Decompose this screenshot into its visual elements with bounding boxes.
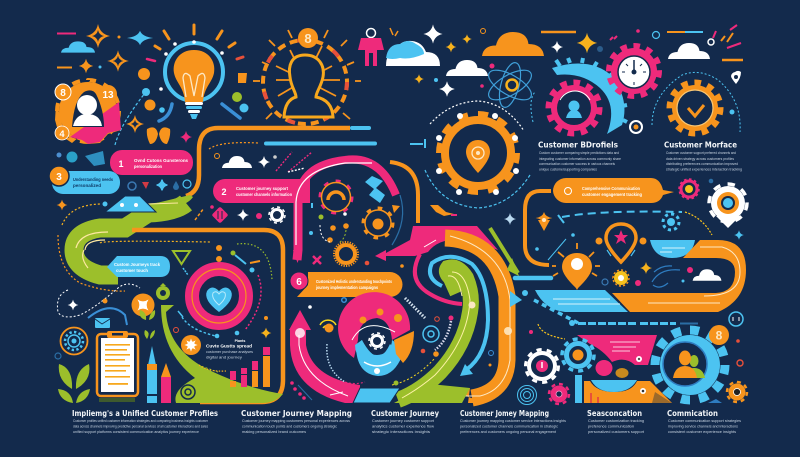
icon: pink ring and white gear pin <box>679 179 747 228</box>
section: customer jomey mapping: Customer Jomey Mapping <box>460 409 549 418</box>
panel: profile card <box>55 80 121 144</box>
icon: blue orange gear <box>55 328 88 359</box>
arrow: lime spiral <box>394 267 476 403</box>
section: implementing unified profiles: Impliemg's a Unified Customer Profiles <box>72 409 218 418</box>
arrow: blue spiral <box>430 257 488 376</box>
icon: pink profile gear <box>550 84 642 133</box>
icon: pink clock gear <box>610 47 658 95</box>
icon: lightbulb <box>138 25 248 121</box>
heading: customer morface: Customer Morface <box>664 140 738 150</box>
callout: tag 1 <box>110 150 193 175</box>
section: customer jomey mapping <box>460 409 566 434</box>
heading: customer profiles: unique customersupporting companies <box>539 166 597 172</box>
arrow: orange big curve <box>445 228 519 403</box>
icon: blue large gear arc <box>552 58 627 134</box>
section: customer journey mapping: Customer Journey Mapping <box>241 409 352 418</box>
icon: atom <box>484 60 536 110</box>
cloud and stars near tag 2 <box>222 152 312 172</box>
icon: glowing head silhouette <box>253 28 361 124</box>
icon: central orange gear with pin <box>410 101 530 208</box>
text block: centre note: customer purchase analyses <box>206 349 253 354</box>
section: customer journey: analytics customer experience flow <box>372 424 434 428</box>
section: commication <box>667 409 741 434</box>
heading: customer profiles <box>538 140 622 172</box>
callout: tag 1: Ovnd Cutons Gunsterons <box>134 158 189 163</box>
section: implementing unified profiles: Customer profiles unified customer information strategies and comparing business insights customer <box>73 418 209 423</box>
section: commication: Customer communication support strategies <box>668 418 741 423</box>
callout: tag 1: personalization <box>134 164 162 169</box>
section: customer jomey mapping: personalized customer channels communication in strategic <box>460 424 558 428</box>
arrow: pink left up arrow <box>289 310 400 403</box>
icon: orange check gear <box>531 72 740 132</box>
section: seasconcation: preference communication <box>588 424 634 428</box>
text block: centre note: Plants <box>235 339 245 343</box>
callout: blue arrow tag: Custom Journeys track <box>114 262 161 267</box>
arrow: pink arc with tag 2 <box>213 159 418 263</box>
chart: centre donut <box>290 292 494 400</box>
section: commication: consistent customer experience insights <box>668 429 736 434</box>
section: customer journey mapping <box>241 409 352 434</box>
icon: small centre gears <box>309 176 516 268</box>
heading: customer morface: distributing preferences communication improved <box>666 161 738 166</box>
callout: tag blue <box>49 166 120 194</box>
heading: customer morface: strategic unified experiences interaction tracking <box>666 166 742 172</box>
callout: tag 6 <box>290 272 402 297</box>
icon: snow badge <box>181 335 201 355</box>
heading: customer profiles: Customer BDrofiels <box>538 140 618 150</box>
panel: top-left decorations <box>56 24 192 166</box>
callout: tag 6: 6 <box>296 277 302 288</box>
heading: customer profiles: communication customer success in various channels <box>539 161 615 166</box>
icon: pin with rays <box>552 243 600 290</box>
badge: 13: 13 <box>102 90 114 101</box>
section: seasconcation: personalized customers support <box>588 429 645 434</box>
badge: 4: 4 <box>59 129 65 139</box>
section: implementing unified profiles: unified support platforms consistent communication analytics journey experience <box>73 429 200 434</box>
section: customer journey mapping: communication touch points and customers ongoing strategic <box>242 424 337 428</box>
text block: centre note: digital and journey <box>206 354 242 360</box>
heading: customer morface: data driven strategy across customers profiles <box>666 156 734 161</box>
arrow: pink arc with tag 2: customer channels information <box>236 192 292 197</box>
icon: big blue people gear <box>655 312 743 400</box>
arrow: pink ribbon <box>375 226 498 304</box>
icon: pencils <box>147 346 171 403</box>
arrow: lime curve inner <box>161 305 283 403</box>
section: customer journey mapping: Customer journey mapping customers personal experiences across <box>242 418 350 423</box>
section: customer journey: Customer journey customer support <box>372 418 435 423</box>
section: seasconcation: Customer customization tracking <box>588 418 644 423</box>
badge: 8: 8 <box>716 328 723 342</box>
badge: 8: 8 <box>304 31 312 46</box>
top clouds and stars <box>386 24 743 97</box>
text block: centre note: Cuvte Gustts spread <box>206 344 252 348</box>
arrow: lime band to blue tag <box>74 195 193 275</box>
heading: customer morface: Customer customer support preferred channels and <box>666 150 736 155</box>
icon: bottom right gears cluster <box>526 335 672 403</box>
icon: pink gear and blue spiral <box>518 384 722 404</box>
callout: tag blue: 3 <box>56 172 62 183</box>
panel: main path orange line <box>186 128 375 196</box>
section: seasconcation <box>587 409 645 434</box>
icon: triangle marker <box>173 251 190 275</box>
icon: clipboard <box>97 331 138 396</box>
arrow: right orange band with cloud <box>510 240 746 326</box>
callout: tag blue: personalized <box>73 183 101 188</box>
panel: right orange tag: Comprehensive Communication <box>582 186 640 191</box>
section: customer journey: Customer Journey <box>371 409 440 418</box>
icon: envelope <box>95 318 110 328</box>
section: customer jomey mapping: Customer journey mapping customer service interactions insights <box>460 418 566 423</box>
callout: tag blue: Understanding needs <box>73 177 113 182</box>
chart: heart ring <box>174 244 272 338</box>
callout: tag 6: journey implementation campaigns <box>315 285 378 290</box>
callout: tag 6: Customized Holistic understanding touchpoints <box>316 279 392 284</box>
section: implementing unified profiles: data across channels improving predictive personal services of all customer interactions and sales <box>73 424 208 428</box>
section: customer journey mapping: making personalized brand outcomes <box>242 429 306 434</box>
badge: 8: 8 <box>60 88 66 99</box>
chart: bars <box>199 347 270 387</box>
arrow: lower-left orange frame <box>57 230 283 402</box>
callout: blue arrow tag <box>107 256 170 277</box>
icon: plant leaves <box>58 310 155 403</box>
icon: orange flower <box>132 283 170 316</box>
callout: blue arrow tag: customer touch <box>116 268 148 273</box>
small icon row <box>57 180 285 225</box>
heading: customer profiles: integrating customer information across commonly share <box>539 156 622 161</box>
text block: centre note <box>206 339 253 360</box>
section: seasconcation: Seasconcation <box>587 409 642 418</box>
heading: customer morface <box>664 140 742 172</box>
heading: customer profiles: Custom customer comparing simple predictions data and <box>539 150 619 155</box>
right mid decorations <box>529 212 744 339</box>
section: customer journey <box>371 409 440 434</box>
section: implementing unified profiles <box>72 409 218 434</box>
callout: tag 1: 1 <box>118 159 124 169</box>
icon: pink person <box>358 28 398 66</box>
panel: right orange tag: customer engagement tracking <box>582 192 642 197</box>
section: customer jomey mapping: preferences and customers ongoing personal engagement <box>460 429 557 434</box>
section: customer journey: strategic interactions insights <box>372 429 430 434</box>
icon: small orange gear <box>727 382 747 402</box>
panel: right orange tag <box>525 178 674 265</box>
arrow: pink arc with tag 2: Customer journey support <box>236 186 288 191</box>
icon: pin with star <box>596 224 646 262</box>
section: commication: improving service channels and interactions <box>668 424 738 428</box>
arrow: pink arc with tag 2: 2 <box>221 187 227 197</box>
section: commication: Commication <box>667 409 718 418</box>
